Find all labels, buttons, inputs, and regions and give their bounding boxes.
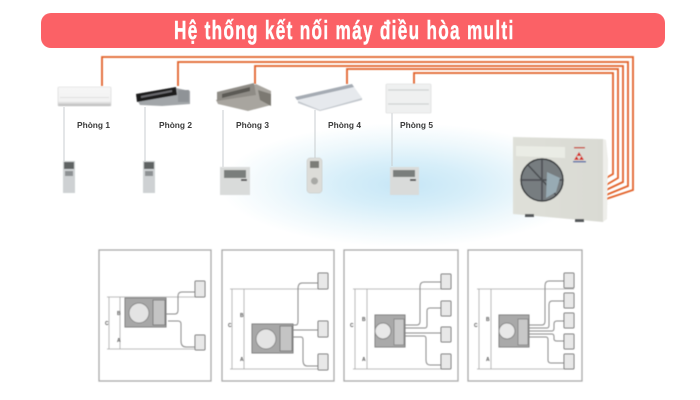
installation diagram 1 [99,250,211,381]
title: Hệ thống kết nối máy điều hòa multi [174,15,513,45]
dimension labels: A [362,357,366,363]
dimension labels: A [486,357,490,363]
title banner [41,13,665,48]
indoor unit 3: grey duct [216,83,271,111]
refrigerant pipes [102,57,633,199]
dimension labels [105,311,121,344]
label: Phòng 5: Phòng 5 [400,120,433,130]
wall controller 5 [390,167,419,195]
label: Phòng 2: Phòng 2 [159,120,192,130]
indoor unit 4: ceiling suspended [295,84,362,111]
dimension labels [474,317,490,363]
feet [525,214,534,217]
handheld remote 4 [307,158,322,193]
dimension labels: C [105,321,109,327]
dimension labels: C [474,323,478,329]
indoor unit 2: black duct [136,87,190,106]
dimension labels: B [240,313,244,319]
installation diagram 2 [222,250,334,381]
room labels [77,120,433,130]
dimension labels: A [240,357,244,363]
dimension labels: C [228,323,232,329]
dimension labels: B [362,317,366,323]
dimension labels: B [117,311,121,317]
remote 1 [63,161,75,193]
indoor unit 1: wall mounted [58,87,111,106]
logo [573,147,586,162]
dimension labels: B [486,317,490,323]
label: Phòng 3: Phòng 3 [236,120,269,130]
fan [521,159,563,201]
wall controller 3 [220,167,250,195]
remote 2 [143,161,155,193]
label: Phòng 4: Phòng 4 [328,120,361,130]
outdoor unit [513,137,608,222]
indoor unit 5: floor console [386,84,431,113]
installation diagram 4 [468,250,582,381]
installation diagram 3 [344,250,458,381]
dimension labels [350,317,366,363]
remote control wires [64,107,392,167]
dimension labels: C [350,323,354,329]
background glow [220,123,590,247]
dimension labels: A [117,338,121,344]
label: Phòng 1: Phòng 1 [77,120,110,130]
dimension labels [228,313,244,363]
